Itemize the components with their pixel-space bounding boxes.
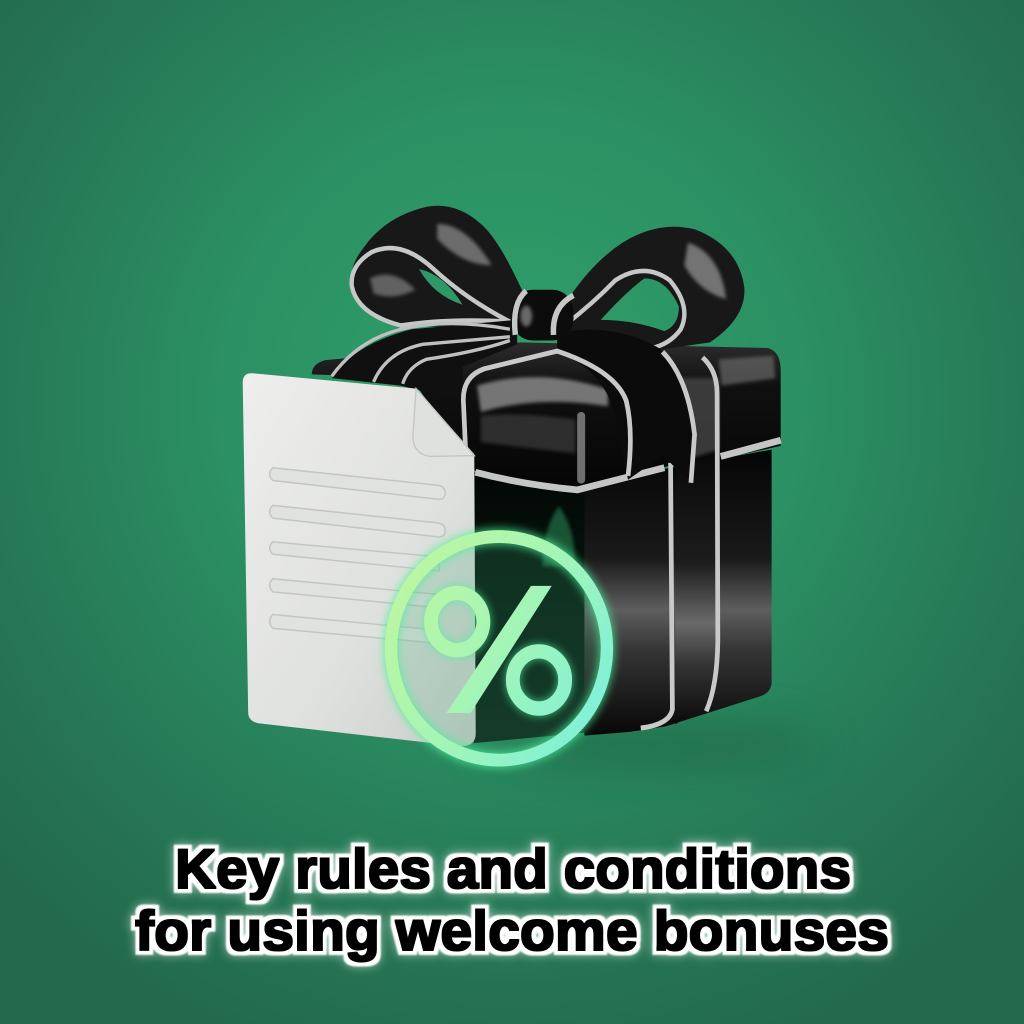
title [135,837,889,962]
ring [391,537,607,760]
ring glow [391,537,607,760]
right loop silver edge [564,271,684,348]
bow [332,206,744,484]
green reflection [543,506,575,566]
right tail [557,330,695,484]
line 5 [270,614,439,643]
line 1 [270,468,445,499]
document sheet [243,373,476,746]
left loop [351,206,524,329]
title line 1: Key rules and conditions [175,837,851,900]
line 4 [270,579,439,608]
right loop gloss [684,243,726,299]
illustration [243,206,781,760]
left loop gloss [437,224,492,265]
percent slash [446,586,552,713]
knot silver bands [515,291,574,335]
left streamers [332,320,517,401]
left loop inner gloss [370,275,415,296]
box side face [584,450,772,736]
badge glass disc [392,537,606,759]
lid silver edge [475,440,781,490]
box lid [312,342,781,491]
text lines [270,468,445,643]
bow knot [512,290,574,341]
ground shadow [480,721,820,769]
percent top ring [431,593,483,650]
lid side gloss [719,356,775,386]
percent bottom ring [513,651,565,709]
vertical ribbon band [675,457,717,724]
lid lower gloss [481,415,575,453]
left loop silver edge [352,248,510,325]
line 2 [270,505,445,537]
percent badge [391,537,607,760]
document [243,373,476,746]
line 3 [270,542,439,571]
right loop [557,227,744,350]
title line 2: for using welcome bonuses [135,899,889,962]
streamer silver lines [332,324,510,384]
knot gloss [520,306,532,327]
gift box [312,342,781,743]
front ribbon silver [463,351,695,483]
percent sign [431,586,565,713]
document fold [413,389,474,456]
ribbon silver edges [641,357,718,728]
lid side lower gloss [675,378,719,463]
lid front corner highlight [577,412,585,484]
box front face [474,472,594,743]
lid gloss [477,377,608,412]
